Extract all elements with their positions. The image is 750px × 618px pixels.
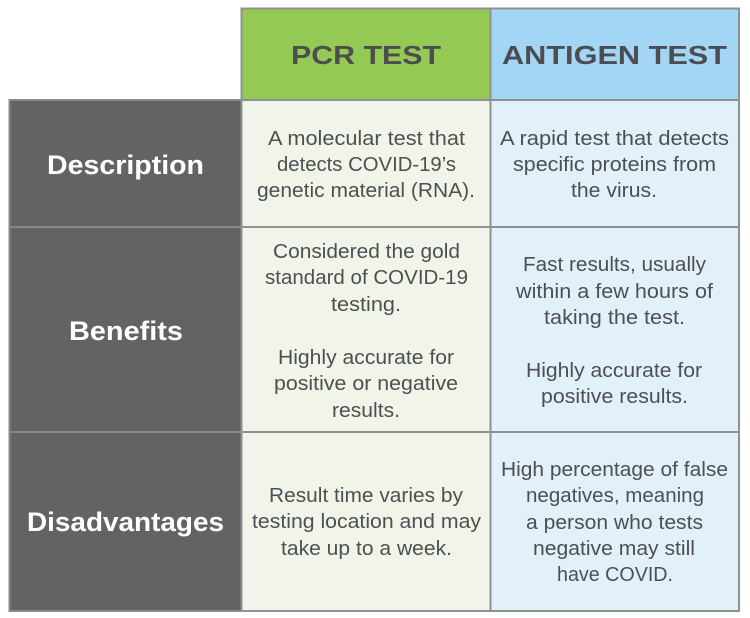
PCR description cell: genetic material (RNA). [257, 180, 475, 202]
PCR disadvantages cell [242, 432, 490, 611]
antigen disadvantages cell: negatives, meaning [526, 485, 704, 507]
antigen disadvantages cell: negative may still [533, 538, 695, 560]
header cell: PCR TEST: PCR TEST [291, 40, 441, 70]
row label: Disadvantages: Disadvantages [27, 507, 224, 537]
antigen disadvantages cell: have COVID. [557, 564, 673, 586]
header cell: ANTIGEN TEST: ANTIGEN TEST [502, 40, 727, 70]
PCR benefits cell: testing. [331, 294, 401, 316]
PCR description cell: A molecular test that [268, 128, 465, 150]
row label: Benefits [10, 227, 242, 432]
header cell: PCR TEST [242, 8, 490, 100]
row label: Description: Description [47, 150, 204, 180]
antigen disadvantages cell [490, 432, 739, 611]
PCR description cell [242, 100, 490, 227]
header cell: ANTIGEN TEST [490, 8, 739, 100]
row label: Description [10, 100, 242, 227]
PCR benefits cell: Highly accurate for [278, 347, 454, 369]
PCR benefits cell: Considered the gold [273, 241, 460, 263]
antigen disadvantages cell: High percentage of false [501, 459, 728, 481]
row label: Benefits: Benefits [69, 316, 183, 346]
row label: Disadvantages [10, 432, 242, 611]
antigen description cell: A rapid test that detects [500, 128, 729, 150]
PCR benefits cell: results. [332, 400, 400, 422]
antigen description cell: the virus. [571, 180, 657, 202]
PCR disadvantages cell: Result time varies by [269, 485, 463, 507]
antigen benefits cell: Fast results, usually [523, 254, 706, 276]
antigen benefits cell: taking the test. [544, 307, 685, 329]
antigen benefits cell: positive results. [541, 386, 688, 408]
antigen benefits cell [490, 227, 739, 432]
PCR disadvantages cell: testing location and may [252, 511, 481, 533]
PCR benefits cell: standard of COVID-19 [265, 267, 468, 289]
antigen benefits cell: Highly accurate for [526, 360, 702, 382]
antigen disadvantages cell: a person who tests [526, 512, 703, 534]
antigen description cell: specific proteins from [513, 154, 716, 176]
antigen benefits cell: within a few hours of [515, 281, 713, 303]
PCR benefits cell [242, 227, 490, 432]
antigen description cell [490, 100, 739, 227]
PCR benefits cell: positive or negative [274, 373, 458, 395]
PCR description cell: detects COVID-19’s [277, 154, 456, 176]
PCR disadvantages cell: take up to a week. [281, 538, 452, 560]
